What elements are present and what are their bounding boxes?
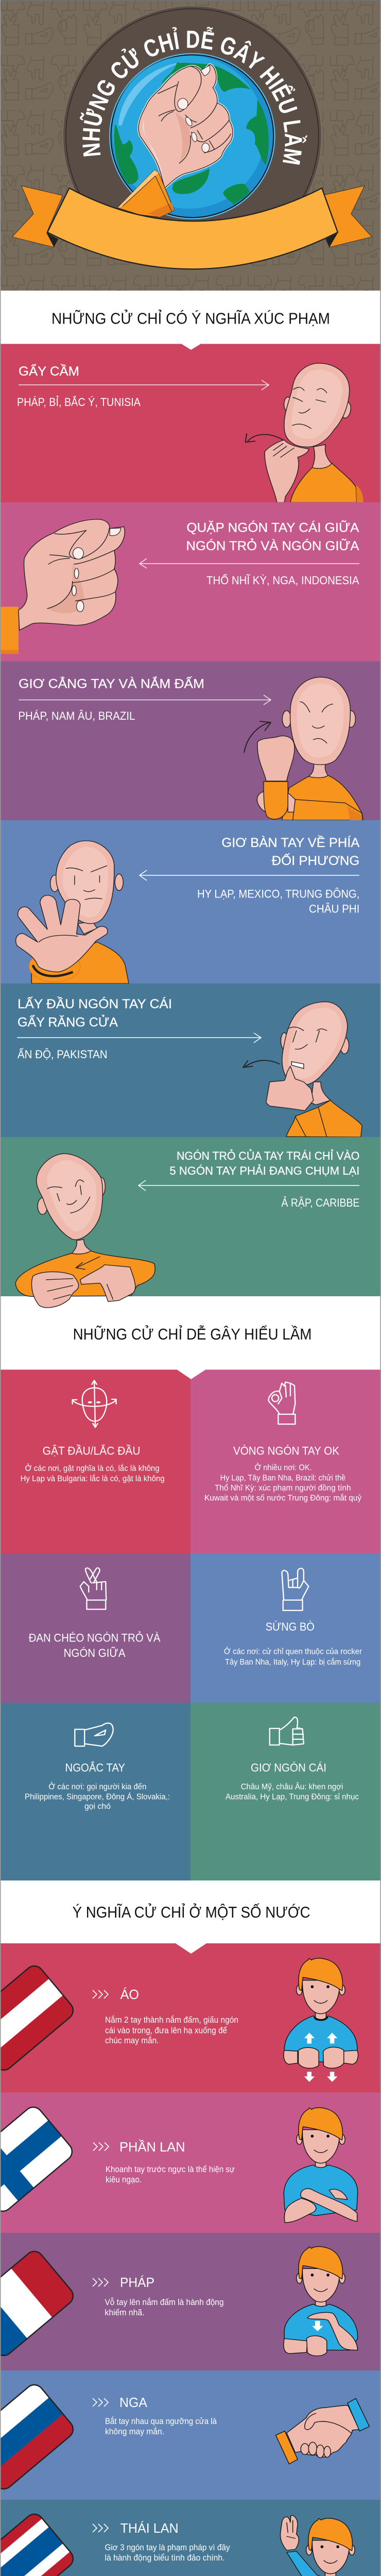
description: Bắt tay nhau qua ngưỡng cửa là xyxy=(105,2416,217,2426)
flag: Austria xyxy=(1,1965,74,2071)
card text xyxy=(21,1464,165,1483)
panel: Pháp xyxy=(0,2233,381,2370)
person flicking chin xyxy=(246,363,363,502)
panel: Phần Lan xyxy=(0,2093,381,2233)
panel: quặp ngón tay xyxy=(0,502,381,662)
flag: Finland xyxy=(1,2106,73,2212)
fist xyxy=(138,64,233,188)
panel: Nga xyxy=(0,2370,381,2500)
description xyxy=(105,2543,230,2563)
handshake xyxy=(276,2398,369,2464)
section heading: cử chỉ xúc phạm xyxy=(0,291,381,350)
card: giơ ngón cái xyxy=(190,1703,381,1880)
heading: GIƠ BÀN TAY VỀ PHÍA xyxy=(221,835,360,850)
person raising fist xyxy=(244,677,363,820)
arrow xyxy=(17,1033,261,1043)
description xyxy=(106,2165,235,2184)
boy slapping fist xyxy=(284,2247,358,2356)
curved title: NHỮNG CỬ CHỈ DỄ GÂY HIỂU LẦM xyxy=(80,27,307,165)
section heading: ý nghĩa ở một số nước: Ý NGHĨA CỬ CHỈ Ở MỘT SỐ NƯỚC xyxy=(73,1903,310,1921)
countries: HY LẠP, MEXICO, TRUNG ĐÔNG, xyxy=(197,887,359,900)
person with open hand xyxy=(16,841,129,984)
card text: Ở các nơi, gật nghĩa là có, lắc là không xyxy=(25,1464,160,1473)
arrow xyxy=(138,1180,359,1191)
flag: Thailand xyxy=(0,2510,77,2576)
description: Nắm 2 tay thành nắm đấm, giấu ngón xyxy=(105,2015,238,2025)
card title: NGOẮC TAY xyxy=(65,1761,125,1774)
icon: thumbs up xyxy=(270,1717,304,1745)
header banner xyxy=(1,0,381,291)
description xyxy=(105,2297,223,2317)
arrow xyxy=(140,870,359,880)
country name: THÁI LAN xyxy=(120,2520,179,2536)
card: ngoắc tay xyxy=(0,1703,190,1880)
heading: LẤY ĐẦU NGÓN TAY CÁI xyxy=(18,996,172,1011)
card text: Australia, Hy Lạp, Trung Đông: sỉ nhục xyxy=(226,1792,359,1801)
description xyxy=(105,2015,238,2045)
card text xyxy=(224,1647,362,1667)
panel: gẩy răng cửa xyxy=(0,984,381,1137)
description xyxy=(105,2416,217,2436)
panel: Áo xyxy=(0,1943,381,2093)
card title xyxy=(29,1632,161,1659)
ribbon xyxy=(12,186,372,269)
description: khiếm nhã. xyxy=(105,2308,144,2317)
countries: THỔ NHĨ KỲ, NGA, INDONESIA xyxy=(206,574,359,587)
card text: Ở các nơi: gọi người kia đến xyxy=(48,1782,146,1791)
description: kiêu ngạo. xyxy=(106,2175,142,2184)
icon: horns hand xyxy=(282,1568,308,1611)
card text: Ở nhiều nơi: OK. xyxy=(255,1463,312,1472)
arrow xyxy=(140,558,359,568)
countries: Ả RẬP, CARIBBE xyxy=(281,1196,359,1209)
countries: PHÁP, BỈ, BẮC Ý, TUNISIA xyxy=(17,396,141,409)
boy with fists xyxy=(284,1958,358,2082)
card: đan chéo ngón xyxy=(0,1554,190,1703)
country name: ÁO xyxy=(120,1987,139,2002)
card title: GẬT ĐẦU/LẮC ĐẦU xyxy=(43,1445,141,1458)
card text: Thổ Nhĩ Kỳ: xúc phạm người đồng tính xyxy=(215,1484,351,1493)
card title: VÒNG NGÓN TAY OK xyxy=(233,1445,339,1458)
card text: Châu Mỹ, châu Âu: khen ngợi xyxy=(241,1783,343,1791)
heading line 2: GẨY RĂNG CỬA xyxy=(18,1014,118,1029)
icon: ok hand xyxy=(268,1382,295,1424)
countries line 2: CHÂU PHI xyxy=(309,902,359,915)
badge: dark dome xyxy=(63,6,322,266)
country name: NGA xyxy=(119,2395,148,2410)
flag: France xyxy=(1,2250,74,2357)
countries: PHÁP, NAM ÂU, BRAZIL xyxy=(18,709,135,722)
panel: ngón trỏ chỉ vào năm ngón xyxy=(0,1137,381,1308)
panel: giơ bàn tay xyxy=(0,820,381,984)
chevrons xyxy=(93,2278,108,2286)
countries: ẤN ĐỘ, PAKISTAN xyxy=(18,1048,108,1061)
person pointing at fingers xyxy=(15,1154,155,1308)
card text: Ở các nơi: cử chỉ quen thuộc của rocker xyxy=(224,1647,362,1656)
section heading: ý nghĩa ở một số nước xyxy=(0,1880,381,1943)
section heading: cử chỉ xúc phạm: NHỮNG CỬ CHỈ CÓ Ý NGHĨA XÚC PHẠM xyxy=(51,309,330,328)
country name: PHẦN LAN xyxy=(119,2139,185,2155)
card text: Kuwait và một số nước Trung Đông: mắt quỷ xyxy=(204,1494,361,1502)
description: Vỗ tay lên nắm đấm là hành động xyxy=(105,2297,223,2307)
description: chúc may mắn. xyxy=(105,2036,159,2045)
heading line 2: ĐỐI PHƯƠNG xyxy=(272,853,359,868)
panel: Thái Lan xyxy=(0,2500,381,2576)
card text: gọi chó xyxy=(84,1802,111,1811)
heading: NGÓN TRỎ CỦA TAY TRÁI CHỈ VÀO xyxy=(177,1149,359,1162)
description: không may mắn. xyxy=(105,2427,164,2436)
arrow xyxy=(19,695,271,705)
card title: ĐAN CHÉO NGÓN TRỎ VÀ xyxy=(29,1632,161,1645)
heading: QUẶP NGÓN TAY CÁI GIỮA xyxy=(186,520,359,535)
chevrons xyxy=(93,2398,108,2406)
sleeve xyxy=(117,170,174,217)
continents xyxy=(114,63,269,205)
description: là hành động biểu tình đảo chính. xyxy=(105,2553,224,2563)
icon: head with arrows xyxy=(73,1380,116,1427)
person flicking teeth xyxy=(243,1002,362,1137)
icon: crossed fingers xyxy=(80,1568,106,1609)
card: sừng bò xyxy=(190,1554,381,1703)
flag: Russia xyxy=(1,2384,74,2489)
fist xyxy=(0,519,125,654)
description: cái vào trong, đưa lên hạ xuống để xyxy=(105,2026,227,2035)
heading: GẨY CẦM xyxy=(19,364,79,379)
card: gật đầu lắc đầu xyxy=(0,1369,190,1554)
card title: SỪNG BÒ xyxy=(266,1620,315,1633)
chevrons xyxy=(93,2142,109,2150)
card text: Philippines, Singapore, Đông Á, Slovakia,: xyxy=(25,1792,170,1801)
card text: Hy Lạp và Bulgaria: lắc là có, gật là không xyxy=(21,1475,165,1483)
card text xyxy=(226,1783,359,1801)
heading line 2: NGÓN TRỎ VÀ NGÓN GIỮA xyxy=(186,538,359,553)
heading line 2: 5 NGÓN TAY PHẢI ĐANG CHỤM LẠI xyxy=(169,1164,359,1177)
card text: Tây Ban Nha, Italy, Hy Lạp: bị cắm sừng xyxy=(225,1658,360,1667)
grid: misunderstood gestures xyxy=(0,1369,381,1880)
section heading: cử chỉ dễ gây hiểu lầm xyxy=(0,1296,381,1379)
panel: gẩy cằm xyxy=(0,344,381,503)
card text xyxy=(204,1463,361,1502)
section heading: cử chỉ dễ gây hiểu lầm: NHỮNG CỬ CHỈ DỄ GÂY HIỂU LẦM xyxy=(73,1325,311,1343)
card title: NGÓN GIỮA xyxy=(64,1647,126,1659)
card title: GIƠ NGÓN CÁI xyxy=(251,1761,326,1774)
chevrons xyxy=(93,1990,108,1998)
panel: giơ cẳng tay xyxy=(0,662,381,820)
description: Khoanh tay trước ngực là thể hiện sự xyxy=(106,2165,235,2174)
card text xyxy=(25,1782,170,1811)
heading: GIƠ CẲNG TAY VÀ NẮM ĐẤM xyxy=(19,676,204,691)
arrow xyxy=(19,380,269,390)
description: Giơ 3 ngón tay là phạm pháp vì đây xyxy=(105,2543,230,2552)
card text: Hy Lạp, Tây Ban Nha, Brazil: chửi thề xyxy=(220,1474,345,1483)
icon: beckoning hand xyxy=(75,1723,113,1746)
country name: PHÁP xyxy=(120,2275,154,2290)
globe with fist xyxy=(109,53,275,219)
boy raising three fingers xyxy=(280,2515,361,2576)
boy with crossed arms xyxy=(284,2108,358,2223)
chevrons xyxy=(93,2524,108,2532)
card: vòng ngón tay ok xyxy=(190,1369,381,1554)
